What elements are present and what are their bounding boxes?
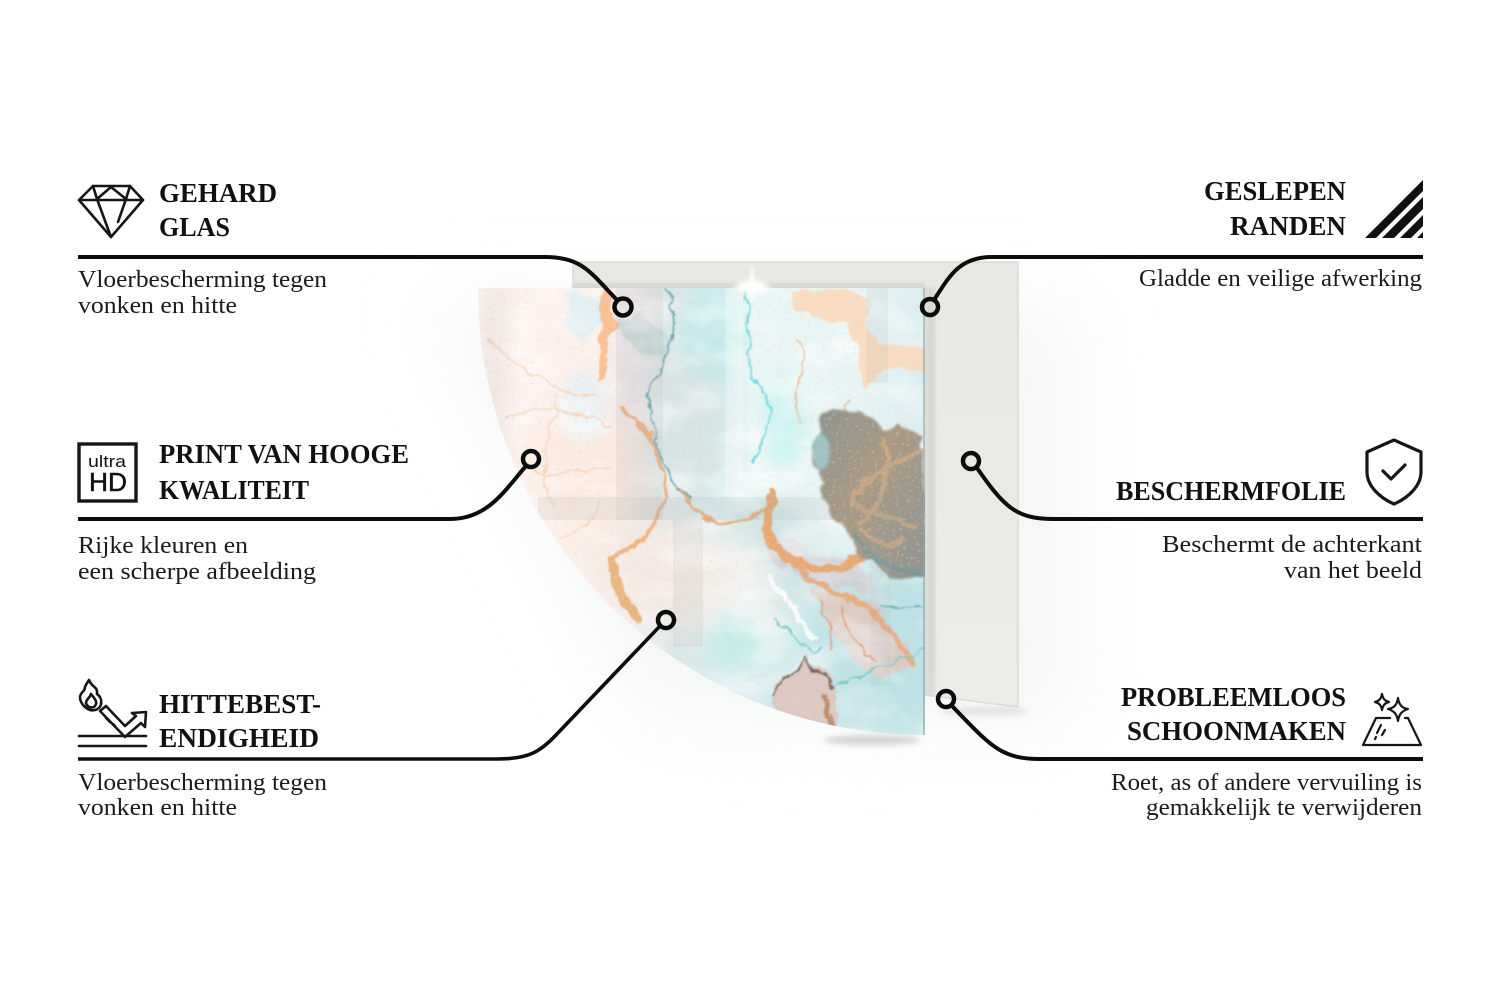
heading: geslepen randen: [1204, 176, 1346, 241]
text: probleemloos schoonmaken: gemakkelijk te verwijderen: [1146, 794, 1422, 821]
heading: print van hooge kwaliteit: PRINT VAN HOOGE: [159, 439, 409, 469]
text: hittebestendigheid: vonken en hitte: [78, 794, 237, 821]
marble: orange veins: [490, 340, 913, 663]
text: probleemloos schoonmaken: Roet, as of andere vervuiling is: [1111, 769, 1422, 796]
text: print van hooge kwaliteit: [78, 532, 316, 585]
heading: probleemloos schoonmaken: SCHOONMAKEN: [1127, 716, 1346, 746]
text: print van hooge kwaliteit: een scherpe afbeelding: [78, 558, 316, 585]
text: gehard glas: [78, 266, 327, 319]
heading: gehard glas: GLAS: [159, 212, 230, 242]
marble: teal veins: [649, 288, 925, 690]
marble: soft colour fields: [540, 288, 925, 735]
text: geslepen randen: Gladde en veilige afwerking: [1139, 265, 1422, 292]
connector: print van hooge kwaliteit: [78, 451, 539, 519]
sparkle highlight: [731, 262, 773, 300]
icon: sparkling clean surface: [1363, 694, 1421, 745]
icon: ultra HD: [79, 444, 136, 501]
connector: hittebestendigheid: [78, 612, 674, 759]
icon: ultra HD: ultra: [88, 452, 127, 471]
soft shadow behind glass: [430, 300, 1080, 745]
heading: geslepen randen: RANDEN: [1230, 211, 1346, 241]
text: probleemloos schoonmaken: [1111, 769, 1422, 821]
back panel: [573, 262, 1018, 707]
marble: fine speckle: [478, 288, 925, 735]
icon: shield with check: [1367, 440, 1421, 504]
heading: hittebestendigheid: HITTEBEST-: [159, 689, 321, 719]
marble: white clouds: [478, 288, 925, 735]
heading: print van hooge kwaliteit: KWALITEIT: [159, 475, 309, 505]
connector: geslepen randen: [922, 257, 1423, 315]
text: beschermfolie: van het beeld: [1284, 557, 1422, 584]
text: hittebestendigheid: [78, 769, 327, 821]
icon: ultra HD: HD: [89, 467, 127, 497]
marble: peach patches: [597, 289, 925, 390]
connector: probleemloos schoonmaken: [938, 691, 1423, 759]
icon: diamond: [79, 186, 143, 237]
heading: probleemloos schoonmaken: [1121, 682, 1346, 746]
icon: heat resistance: [79, 680, 146, 746]
text: gehard glas: Vloerbescherming tegen: [78, 266, 327, 293]
connector: gehard glas: [78, 257, 632, 316]
heading: hittebestendigheid: [159, 689, 321, 753]
heading: gehard glas: GEHARD: [159, 178, 277, 208]
marble: lower brown patch: [772, 655, 838, 735]
heading: beschermfolie: BESCHERMFOLIE: [1116, 476, 1346, 506]
text: gehard glas: vonken en hitte: [78, 292, 237, 319]
heading: print van hooge kwaliteit: [159, 439, 409, 505]
icon: ground edges stripes: [1365, 180, 1423, 238]
text: beschermfolie: [1162, 531, 1422, 584]
heading: probleemloos schoonmaken: PROBLEEMLOOS: [1121, 682, 1346, 712]
marble: brown stain: [812, 409, 925, 580]
text: beschermfolie: Beschermt de achterkant: [1162, 531, 1422, 558]
heading: geslepen randen: GESLEPEN: [1204, 176, 1346, 206]
marble: window reflections: [478, 288, 925, 735]
heading: gehard glas: [159, 178, 277, 242]
text: print van hooge kwaliteit: Rijke kleuren en: [78, 532, 248, 559]
heading: hittebestendigheid: ENDIGHEID: [159, 723, 319, 753]
connector: beschermfolie: [963, 453, 1423, 519]
marble glass quarter circle: [478, 288, 925, 735]
text: hittebestendigheid: Vloerbescherming tegen: [78, 769, 327, 796]
